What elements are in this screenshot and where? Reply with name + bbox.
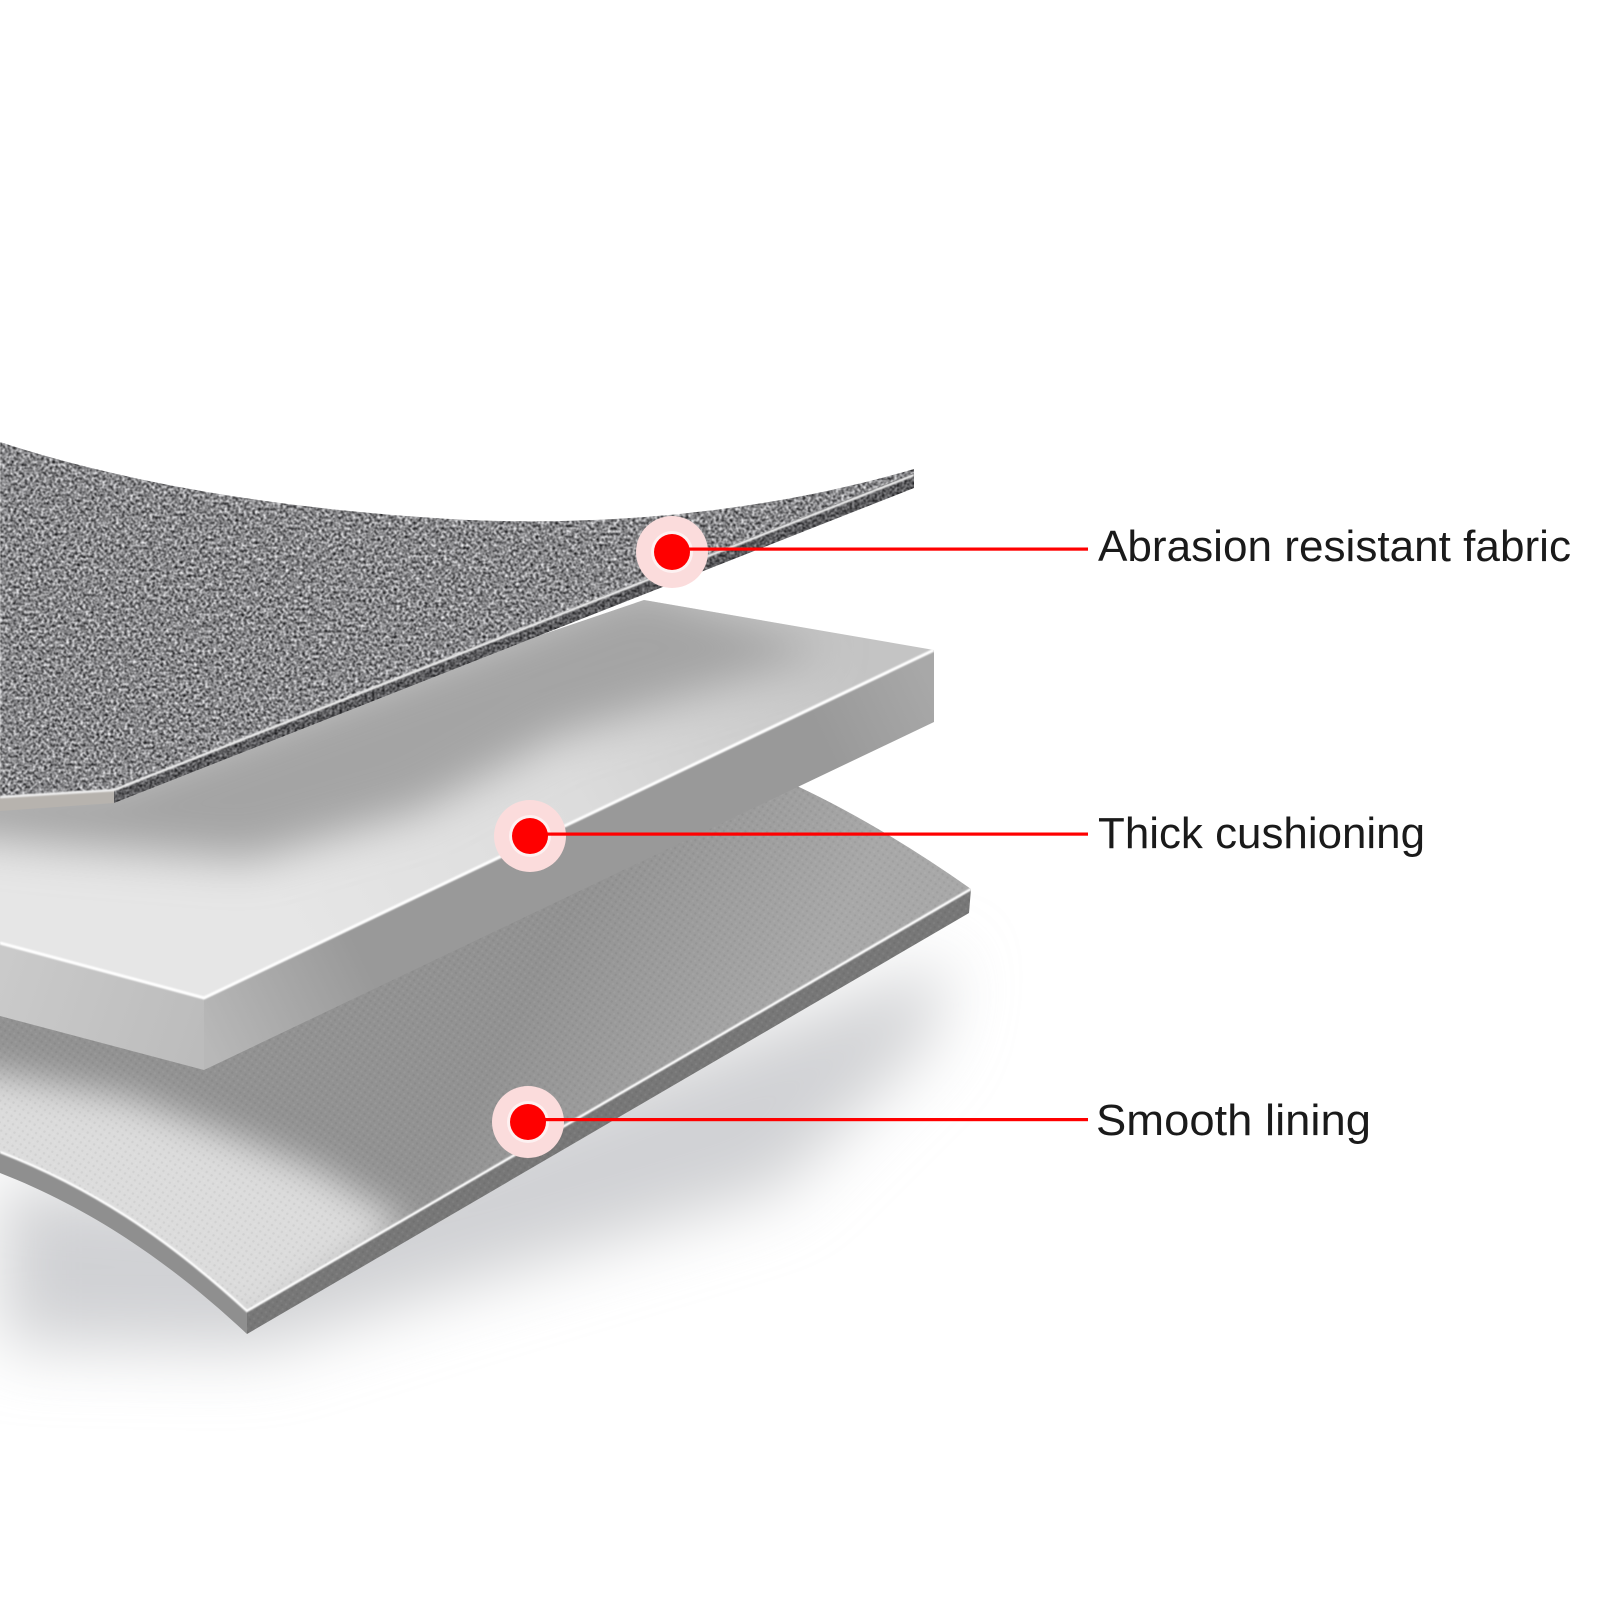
lining light area	[0, 826, 963, 1310]
fabric top face	[0, 430, 920, 810]
lining curved left edge	[0, 1152, 247, 1334]
marker	[494, 800, 566, 872]
leader line	[546, 832, 1088, 836]
fabric dark side	[100, 465, 920, 810]
cushion top face	[0, 600, 934, 998]
cushion short side face	[0, 943, 204, 1070]
layer: thick cushioning	[0, 585, 934, 1070]
marker	[492, 1086, 564, 1158]
label: Abrasion resistant fabric	[1098, 522, 1571, 571]
label: Smooth lining	[1096, 1096, 1371, 1145]
cushion long side face	[204, 650, 934, 1070]
callout: thick cushioning	[494, 800, 1425, 872]
fabric light cut end	[0, 790, 114, 811]
callout: smooth lining	[492, 1086, 1371, 1158]
label: Thick cushioning	[1098, 809, 1425, 858]
lining front edge	[247, 889, 971, 1334]
marker	[636, 516, 708, 588]
lining top face	[0, 786, 971, 1311]
fabric cast shadow on cushion	[0, 585, 830, 860]
leader line	[688, 548, 1088, 551]
layer: smooth lining	[0, 780, 980, 1340]
leader line	[544, 1118, 1088, 1121]
ground shadow	[0, 960, 950, 1350]
layer: abrasion resistant fabric	[0, 430, 920, 811]
callout: abrasion resistant fabric	[636, 516, 1571, 588]
